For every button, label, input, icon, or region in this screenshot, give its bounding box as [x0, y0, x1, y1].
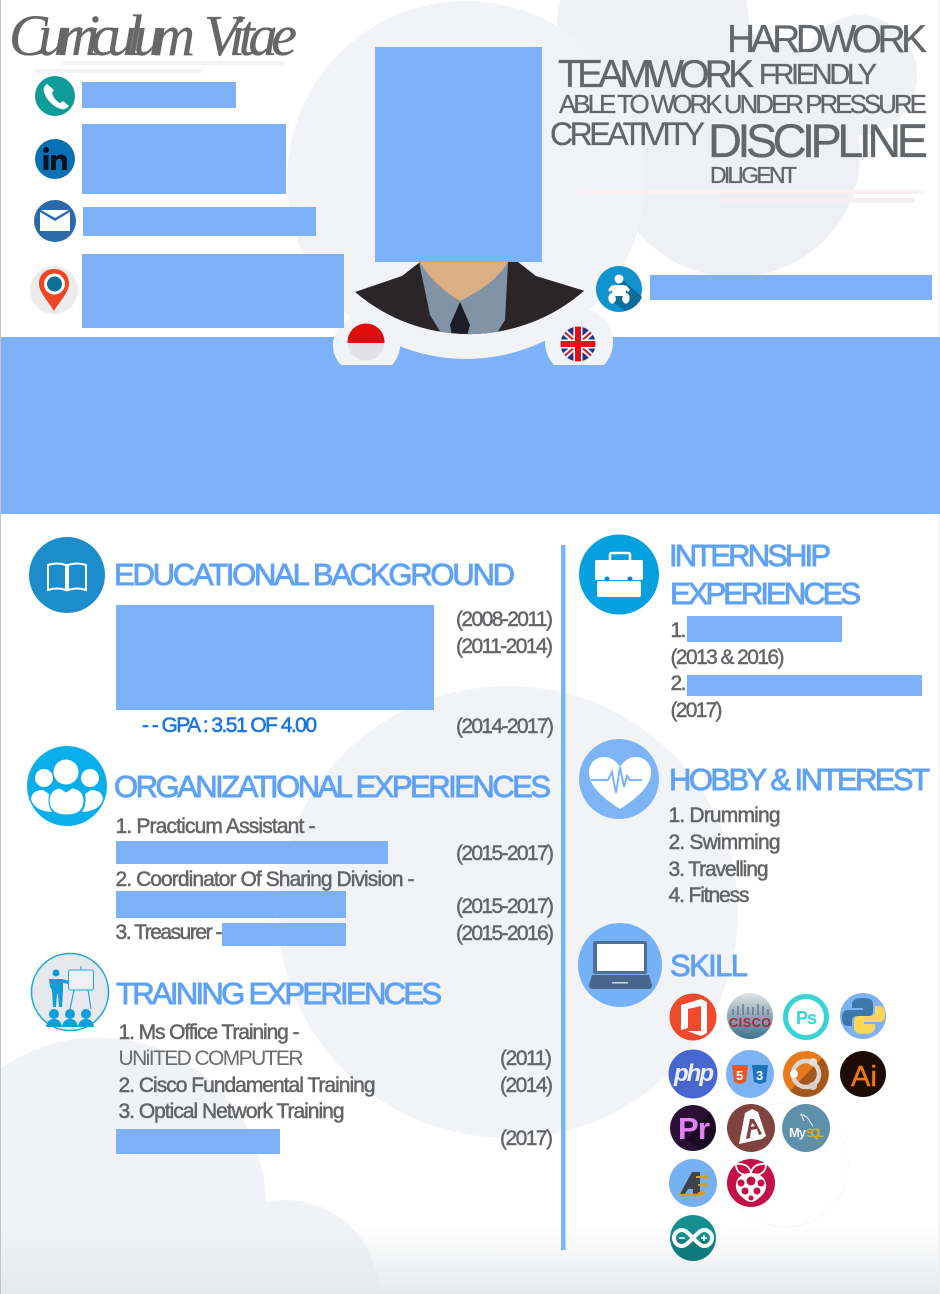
panel: skill	[578, 923, 886, 1261]
icon: arduino ide	[669, 1159, 717, 1207]
dates: education: (2008-2011)	[456, 608, 553, 631]
panel: organizational experiences	[27, 746, 554, 946]
internship entries: 1.	[670, 619, 686, 642]
training entries: 1. Ms Office Training -	[118, 1021, 300, 1044]
heading: internship experiences: EXPERIENCES	[670, 576, 861, 611]
title: Curriculum	[9, 3, 195, 68]
dates: education: (2014-2017)	[456, 715, 554, 738]
icon: ubuntu	[783, 1051, 829, 1097]
icon: heart with pulse	[579, 739, 659, 819]
dates: education	[456, 608, 554, 738]
internship entries: (2017)	[670, 699, 722, 722]
icon: trainer and audience	[32, 954, 108, 1030]
icon: photoshop	[786, 996, 826, 1038]
icon: adobe premiere: Pr	[678, 1111, 710, 1146]
icon: php: php	[673, 1060, 714, 1087]
organization entries: (2015-2017)	[456, 842, 554, 865]
heading: educational background: EDUCATIONAL BACKGROUND	[114, 557, 515, 592]
portrait redaction	[375, 47, 542, 262]
icon: html and css: 3	[756, 1068, 763, 1083]
icon: linkedin	[35, 139, 75, 179]
organization entries: (2015-2017)	[456, 895, 554, 918]
icon: cisco	[727, 993, 773, 1039]
icon: open book	[29, 537, 105, 613]
icon: arduino	[670, 1215, 716, 1261]
vertical divider	[561, 545, 566, 1250]
organization entries: (2015-2016)	[456, 922, 554, 945]
training entries: (2017)	[500, 1127, 553, 1150]
title	[9, 3, 297, 73]
icon: briefcase	[579, 534, 659, 614]
heading: internship experiences: INTERNSHIP	[669, 538, 831, 573]
word cloud: personal traits: CREATIVITY	[550, 116, 705, 152]
hobby list: 3. Travelling	[668, 858, 768, 881]
heading: hobby and interest: HOBBY & INTEREST	[669, 762, 930, 797]
portrait photo	[355, 262, 585, 336]
organization entries: 3. Treasurer -	[116, 921, 222, 944]
training entries: 2. Cisco Fundamental Training	[118, 1074, 376, 1097]
icon: location pin	[30, 266, 78, 314]
icon: ms office	[670, 994, 716, 1040]
panel: hobby and interest	[579, 739, 930, 907]
training entries: 3. Optical Network Training	[118, 1100, 344, 1123]
icon: raspberry pi	[727, 1159, 775, 1207]
hobby list: 1. Drumming	[668, 804, 780, 827]
training entries: (2011)	[500, 1047, 552, 1070]
icon: autocad	[727, 1104, 775, 1152]
icon: cisco: CISCO	[729, 1016, 771, 1030]
internship entries: 2.	[670, 672, 686, 695]
panel: training experiences	[32, 954, 553, 1154]
training entries	[116, 1021, 553, 1154]
training entries: (2014)	[500, 1074, 553, 1097]
icon: html and css	[726, 1050, 774, 1098]
heading: internship experiences	[669, 538, 861, 611]
internship entries	[670, 616, 922, 722]
hobby list	[668, 804, 780, 907]
icon: mysql	[782, 1104, 830, 1152]
birth details redaction	[650, 275, 932, 300]
word cloud: personal traits: DISCIPLINE	[708, 114, 928, 167]
word cloud: personal traits	[550, 18, 928, 203]
icon: laptop	[578, 923, 662, 1007]
faint circle behind skill icons	[724, 1103, 848, 1227]
icon: mysql: SQL	[806, 1126, 824, 1140]
gpa line: - - GPA : 3.51 OF 4.00	[142, 714, 317, 737]
icon: group of people	[27, 746, 107, 826]
panel: educational background	[29, 537, 554, 738]
heading: training experiences: TRAINING EXPERIENCES	[116, 976, 442, 1011]
contact: phone redaction	[82, 82, 236, 108]
icon: adobe illustrator: Ai	[851, 1061, 877, 1093]
word cloud: personal traits: TEAMWORK	[558, 53, 754, 96]
word cloud: personal traits: ABLE TO WORK UNDER PRESSURE	[559, 89, 927, 119]
word cloud: personal traits: DILIGENT	[710, 162, 797, 188]
icon: mysql: My	[789, 1125, 807, 1140]
organization entries: 2. Coordinator Of Sharing Division -	[116, 868, 414, 891]
contact: linkedin redaction	[82, 124, 286, 194]
organization entries: 1. Practicum Assistant -	[116, 815, 316, 838]
redacted banner band	[1, 337, 940, 514]
icon: photoshop: Ps	[796, 1008, 817, 1028]
title: Vitae	[204, 3, 297, 68]
portrait backdrop circle	[287, 1, 645, 365]
dates: education: (2011-2014)	[456, 635, 553, 658]
icon: uk flag	[560, 326, 596, 362]
organization entries	[116, 815, 554, 946]
icon: email	[34, 200, 76, 242]
icon: indonesian flag	[347, 323, 385, 362]
icon: python	[840, 993, 886, 1039]
contact: email redaction	[83, 207, 316, 236]
training entries: UNiITED COMPUTER	[118, 1047, 304, 1070]
icon: php	[668, 1050, 718, 1098]
icon: adobe premiere	[670, 1105, 716, 1151]
icon: phone	[35, 76, 75, 116]
heading: organizational experiences: ORGANIZATIONAL EXPERIENCES	[114, 769, 551, 804]
icon: baby	[596, 266, 642, 312]
heading: skill: SKILL	[670, 948, 748, 983]
education redaction	[116, 605, 434, 710]
hobby list: 4. Fitness	[668, 884, 750, 907]
icon: html and css: 5	[736, 1068, 743, 1083]
hobby list: 2. Swimming	[668, 831, 780, 854]
internship entries: (2013 & 2016)	[670, 646, 784, 669]
panel: internship experiences	[579, 534, 922, 722]
word cloud: personal traits: FRIENDLY	[759, 59, 877, 91]
icon: adobe illustrator	[840, 1051, 886, 1097]
word cloud: personal traits: HARDWORK	[727, 18, 927, 61]
bottom fade	[0, 1225, 940, 1294]
contact: address redaction	[82, 254, 344, 328]
